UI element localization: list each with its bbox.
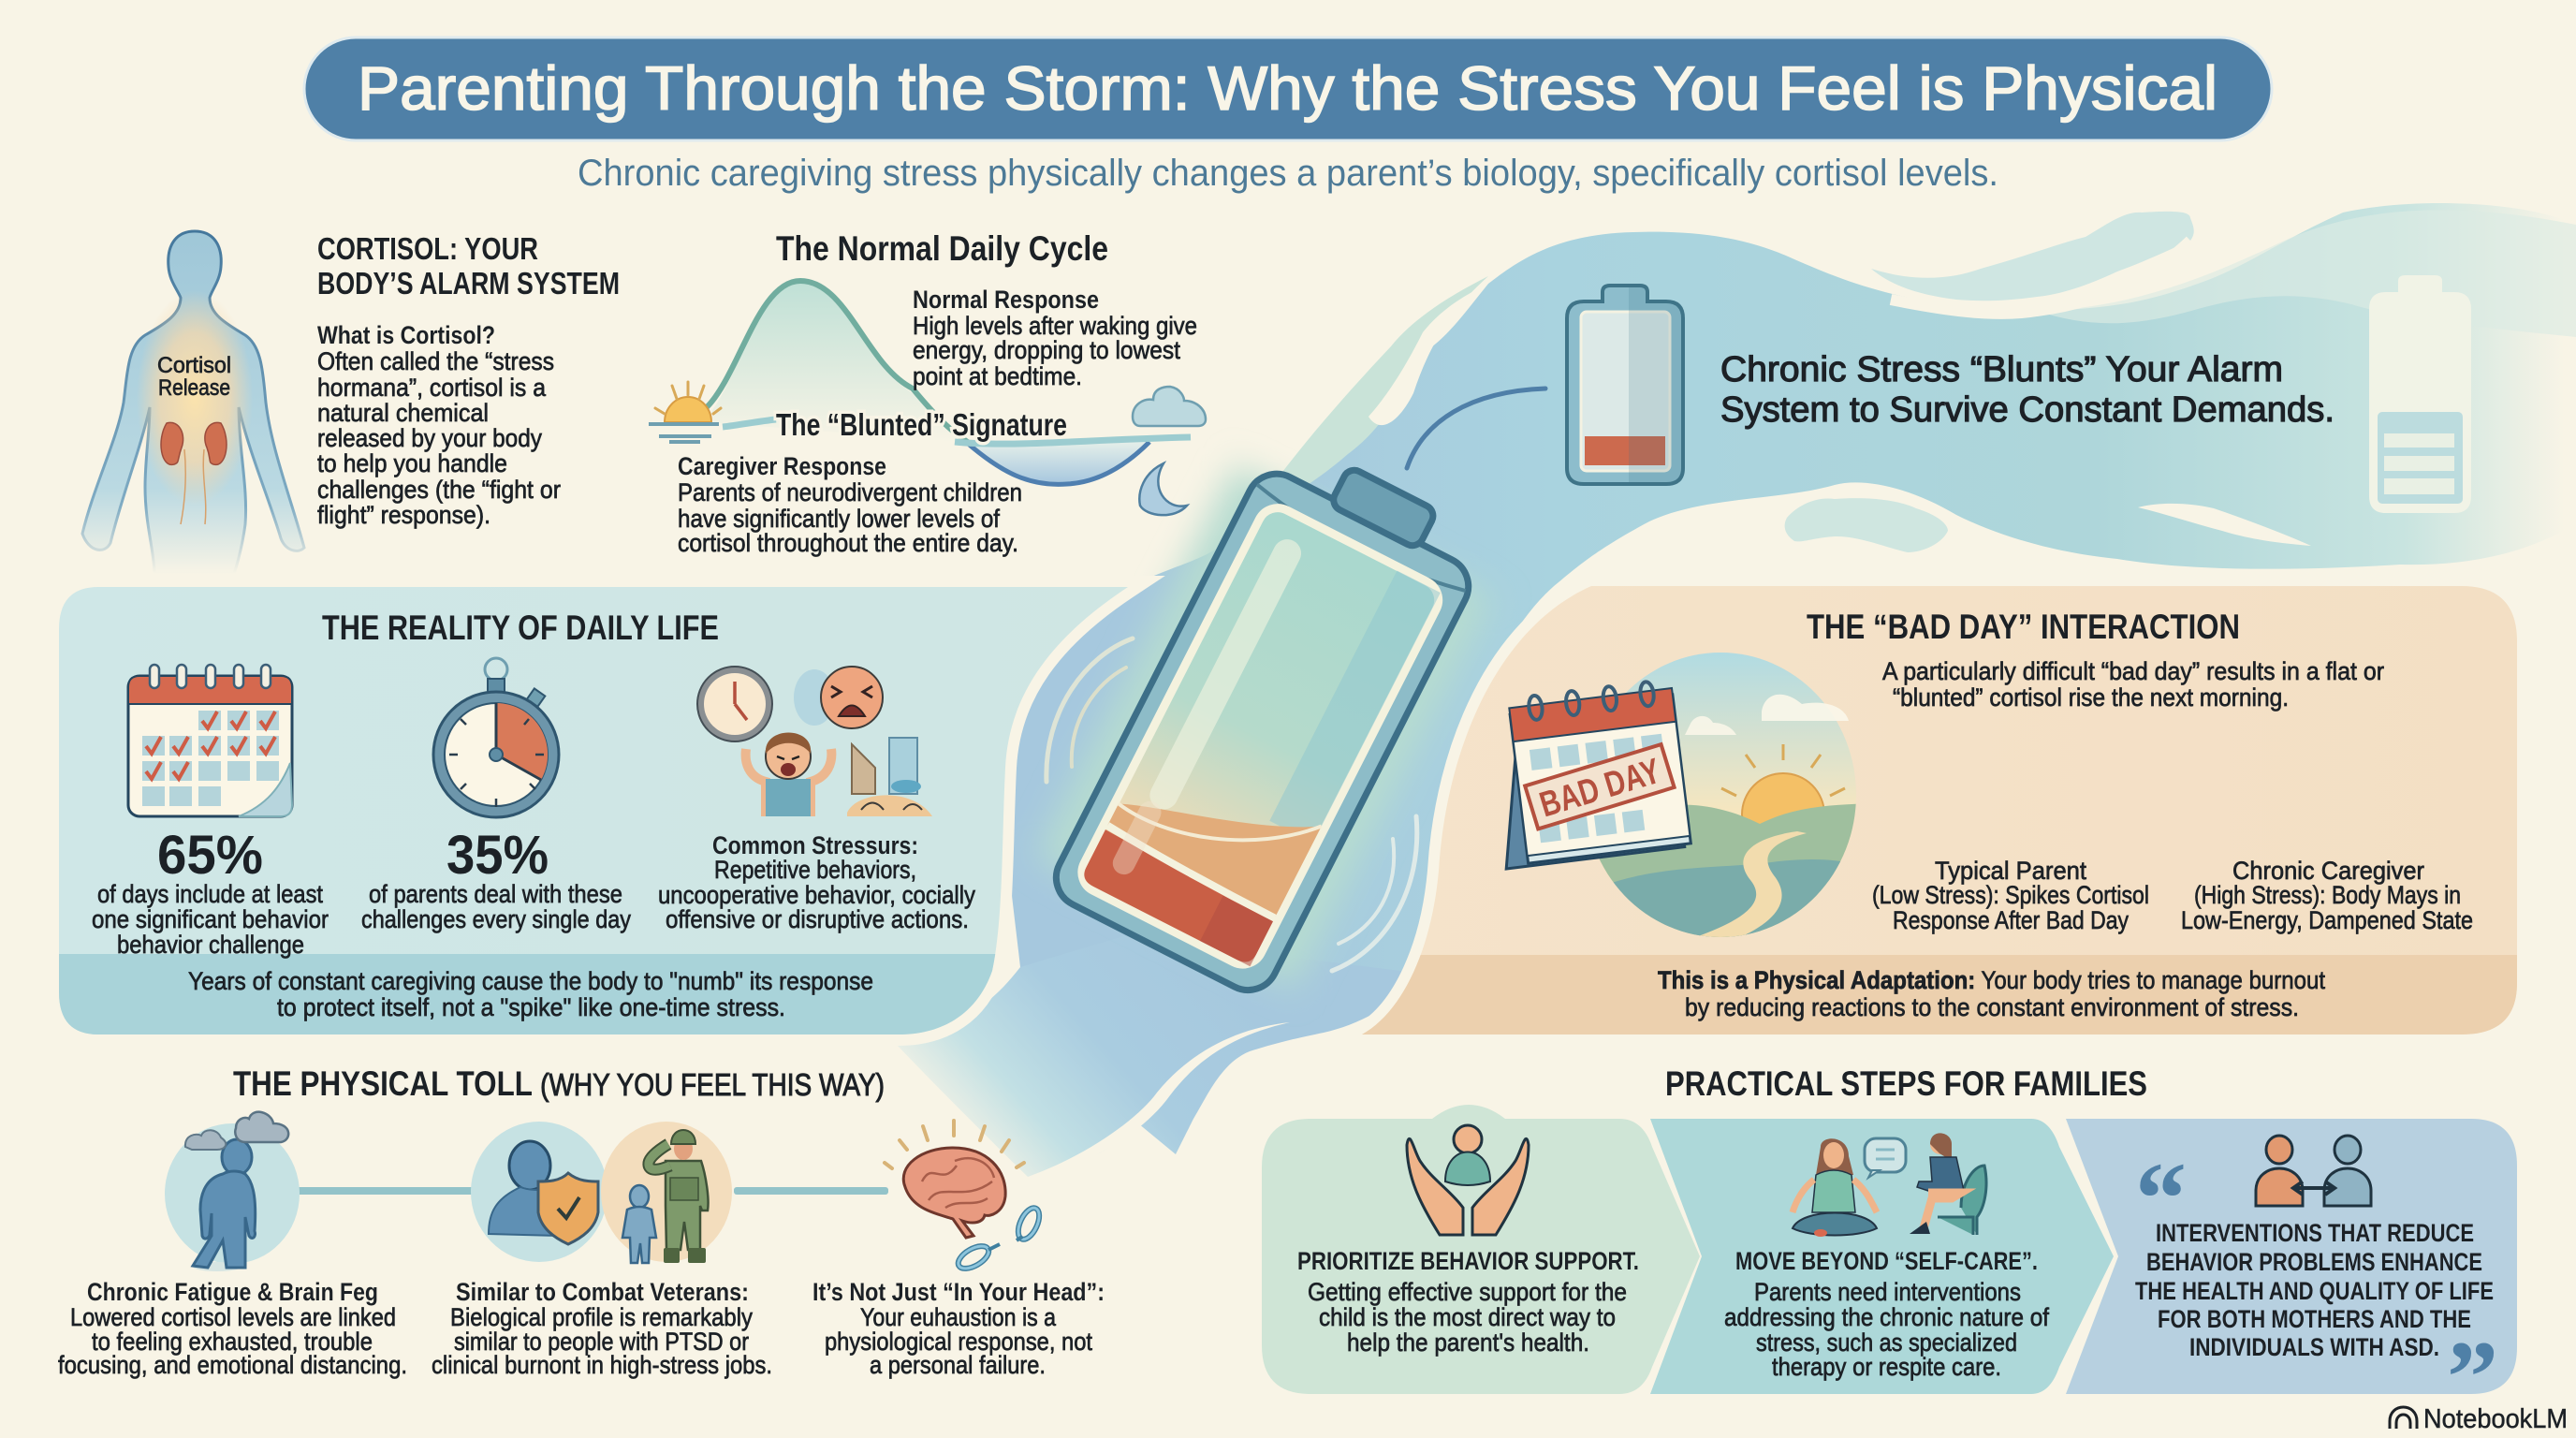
panel: the reality of daily life xyxy=(59,587,1128,1034)
stat: 35% xyxy=(361,825,631,933)
child xyxy=(622,1185,656,1263)
text: child is the most direct way to xyxy=(1319,1303,1616,1331)
text: chronic fatigue: Lowered cortisol levels are linked xyxy=(70,1303,396,1331)
icon: fatigued figure with clouds xyxy=(165,1112,300,1271)
stat: 35%: of parents deal with these xyxy=(369,880,622,908)
text xyxy=(1724,1247,2049,1381)
upper left pale wedge xyxy=(1310,284,1488,456)
text: typical parent xyxy=(1872,857,2149,934)
icon: hands holding person xyxy=(1407,1125,1529,1235)
icon: brain with broken chain xyxy=(885,1121,1044,1273)
text: typical parent: Typical Parent xyxy=(1935,857,2086,885)
flowing stress river xyxy=(898,203,2576,1177)
text: not in your head xyxy=(812,1278,1105,1379)
panel: prioritize behavior support xyxy=(1262,1105,1700,1394)
icon: bad day calendar: BAD DAY xyxy=(1535,752,1665,826)
panel: the bad day interaction xyxy=(1348,586,2518,1034)
text: normal response xyxy=(913,286,1197,390)
icon: stopwatch xyxy=(433,658,559,817)
shield xyxy=(538,1173,598,1244)
text: chronic fatigue: Chronic Fatigue & Brain Feg xyxy=(87,1278,378,1306)
heading: cortisol alarm system xyxy=(317,231,620,301)
text: not in your head: Your euhaustion is a xyxy=(860,1303,1057,1331)
text: combat veterans: Similar to Combat Veterans: xyxy=(456,1278,749,1306)
callout: chronic stress blunts xyxy=(1720,350,2334,430)
icon: large depleted battery xyxy=(1046,431,1495,1001)
title banner xyxy=(304,37,2272,140)
text: what is cortisol xyxy=(317,321,561,529)
icon: quote close: ” xyxy=(2447,1320,2498,1434)
heading: normal daily cycle: The Normal Daily Cycle xyxy=(776,229,1108,268)
pale blob in the cream cut-out xyxy=(1785,498,1948,552)
text: common stressors: offensive or disruptive actions. xyxy=(666,905,969,933)
text: combat veterans xyxy=(432,1278,772,1379)
text: what is cortisol: released by your body xyxy=(317,424,542,452)
callout: chronic stress blunts: System to Survive Constant Demands. xyxy=(1720,390,2334,430)
heading: cortisol alarm system: BODY’S ALARM SYSTEM xyxy=(317,266,620,301)
child xyxy=(746,732,831,816)
text: stress, such as specialized xyxy=(1756,1328,2017,1357)
text: help the parent's health. xyxy=(1347,1328,1589,1357)
body label xyxy=(157,353,231,401)
text: what is cortisol: hormana”, cortisol is a xyxy=(317,374,547,402)
stat: 65%: of days include at least xyxy=(97,880,323,908)
text: THE HEALTH AND QUALITY OF LIFE xyxy=(2135,1277,2494,1305)
text: INDIVIDUALS WITH ASD. xyxy=(2189,1333,2439,1361)
text: caregiver response: have significantly lower levels of xyxy=(678,505,1000,533)
text: common stressors: uncooperative behavior, cocially xyxy=(658,881,975,909)
text: what is cortisol: challenges (the “fight or xyxy=(317,476,561,504)
heading: cortisol alarm system: CORTISOL: YOUR xyxy=(317,231,538,266)
text: caregiver response: cortisol throughout the entire day. xyxy=(678,529,1018,557)
body label: Release xyxy=(158,375,230,401)
text: not in your head: physiological response, not xyxy=(825,1328,1092,1356)
subtitle: Chronic caregiving stress physically changes a parent’s biology, specifically cortisol levels. xyxy=(578,153,1998,194)
icon: human body with kidneys xyxy=(82,231,304,574)
text: MOVE BEYOND “SELF-CARE”. xyxy=(1735,1247,2038,1275)
text: caregiver response: Caregiver Response xyxy=(678,452,886,480)
text: chronic caregiver xyxy=(2181,857,2473,934)
stat: 65% xyxy=(92,825,329,959)
text: FOR BOTH MOTHERS AND THE xyxy=(2158,1305,2471,1333)
callout: physical adaptation xyxy=(1658,966,2325,1021)
battery cap xyxy=(1330,466,1437,550)
stat: 65%: 65% xyxy=(157,825,263,886)
text: bad day result: “blunted” cortisol rise the next morning. xyxy=(1893,683,2289,712)
heading: THE “BAD DAY” INTERACTION xyxy=(1807,608,2240,646)
text: typical parent: Response After Bad Day xyxy=(1893,906,2129,934)
text: BEHAVIOR PROBLEMS ENHANCE xyxy=(2146,1248,2482,1276)
stat: 65%: behavior challenge xyxy=(117,931,304,959)
text: chronic caregiver: (High Stress): Body Mays in xyxy=(2194,881,2461,909)
wave highlights xyxy=(1046,638,1417,971)
callout: numbing xyxy=(188,967,873,1021)
icon: calendar xyxy=(128,665,292,816)
stat: 35%: 35% xyxy=(446,825,549,886)
icon: person with shield and soldier xyxy=(471,1122,732,1263)
text: common stressors: Repetitive behaviors, xyxy=(714,856,916,884)
upper pale wave xyxy=(1871,212,2194,301)
text: normal response: energy, dropping to lowest xyxy=(913,336,1180,364)
text: combat veterans: clinical burnont in high-stress jobs. xyxy=(432,1351,772,1379)
heading: the physical toll: THE PHYSICAL TOLL (WHY YOU FEEL THIS WAY) xyxy=(233,1064,885,1103)
cream sliver xyxy=(2138,504,2311,546)
icon: sun xyxy=(649,382,721,442)
text: what is cortisol: to help you handle xyxy=(317,449,507,477)
text: combat veterans: similar to people with PTSD or xyxy=(454,1328,749,1356)
panel: move beyond self-care xyxy=(1650,1119,2114,1394)
text: chronic fatigue: to feeling exhausted, trouble xyxy=(92,1328,373,1356)
icon: common stressors scene xyxy=(697,667,932,816)
text: bad day result xyxy=(1882,657,2384,712)
icon: quote open: “ xyxy=(2135,1141,2187,1255)
icon: meditating parent and therapist xyxy=(1793,1133,1986,1237)
icon: bad day calendar xyxy=(1486,679,1691,869)
stat: 35%: challenges every single day xyxy=(361,905,631,933)
text: not in your head: a personal failure. xyxy=(870,1351,1046,1379)
text: therapy or respite care. xyxy=(1772,1353,2001,1381)
logo: NotebookLM: NotebookLM xyxy=(2423,1404,2568,1434)
heading: practical steps: PRACTICAL STEPS FOR FAMILIES xyxy=(1665,1064,2147,1103)
text: caregiver response xyxy=(678,452,1022,557)
text: normal response: Normal Response xyxy=(913,286,1099,314)
text: Getting effective support for the xyxy=(1308,1278,1627,1306)
green glow behind battery xyxy=(1035,465,1494,989)
text: Parents need interventions xyxy=(1754,1278,2021,1306)
text: chronic fatigue: focusing, and emotional distancing. xyxy=(58,1351,407,1379)
callout: physical adaptation: by reducing reactions to the constant environment of stress. xyxy=(1685,993,2299,1021)
body label: Cortisol xyxy=(157,353,231,378)
callout: physical adaptation: This is a Physical Adaptation: Your body tries to manage burnout xyxy=(1658,966,2325,994)
text: normal response: High levels after waking give xyxy=(913,312,1197,340)
text: chronic caregiver: Chronic Caregiver xyxy=(2232,857,2424,885)
text: PRIORITIZE BEHAVIOR SUPPORT. xyxy=(1297,1247,1639,1275)
icon: cloud xyxy=(1133,387,1206,426)
text: chronic fatigue xyxy=(58,1278,407,1379)
text: common stressors: Common Stressurs: xyxy=(712,831,918,859)
icon: two people exchange xyxy=(2256,1136,2371,1206)
illustration: sunrise road xyxy=(1599,653,1856,937)
heading: blunted signature: The “Blunted” Signature xyxy=(776,407,1067,442)
soldier xyxy=(649,1130,709,1263)
text: what is cortisol: natural chemical xyxy=(317,399,489,427)
title: Parenting Through the Storm: Why the Stress You Feel is Physical xyxy=(358,53,2217,123)
mess xyxy=(847,738,932,816)
stat: 65%: one significant behavior xyxy=(92,905,329,933)
liquid level xyxy=(1080,740,1322,966)
callout: numbing: Years of constant caregiving cause the body to "numb" its response xyxy=(188,967,873,995)
text: bad day result: A particularly difficult “bad day” results in a flat or xyxy=(1882,657,2384,685)
connector curve xyxy=(1407,389,1545,468)
heading: THE REALITY OF DAILY LIFE xyxy=(322,609,719,647)
text: what is cortisol: flight” response). xyxy=(317,501,490,529)
icon: small low battery xyxy=(1567,286,1683,484)
icon: moon xyxy=(1139,463,1187,515)
text: caregiver response: Parents of neurodivergent children xyxy=(678,478,1022,506)
timeline connectors xyxy=(299,1187,888,1195)
text: what is cortisol: What is Cortisol? xyxy=(317,321,495,349)
callout: numbing: to protect itself, not a "spike" like one-time stress. xyxy=(277,993,785,1021)
text xyxy=(1297,1247,1639,1357)
text: combat veterans: Bielogical profile is remarkably xyxy=(450,1303,753,1331)
text: INTERVENTIONS THAT REDUCE xyxy=(2156,1219,2474,1247)
chart: normal vs blunted daily cycle xyxy=(649,281,1206,515)
text: chronic caregiver: Low-Energy, Dampened State xyxy=(2181,906,2473,934)
icon: ghost battery xyxy=(2369,275,2471,513)
callout: chronic stress blunts: Chronic Stress “Blunts” Your Alarm xyxy=(1720,350,2283,389)
text xyxy=(2135,1219,2494,1361)
text: common stressors xyxy=(658,831,975,933)
text: not in your head: It’s Not Just “In Your Head”: xyxy=(812,1278,1105,1306)
text: typical parent: (Low Stress): Spikes Cortisol xyxy=(1872,881,2149,909)
panel: interventions quote xyxy=(2066,1119,2517,1434)
text: addressing the chronic nature of xyxy=(1724,1303,2049,1331)
text: normal response: point at bedtime. xyxy=(913,362,1082,390)
text: what is cortisol: Often called the “stress xyxy=(317,347,554,375)
